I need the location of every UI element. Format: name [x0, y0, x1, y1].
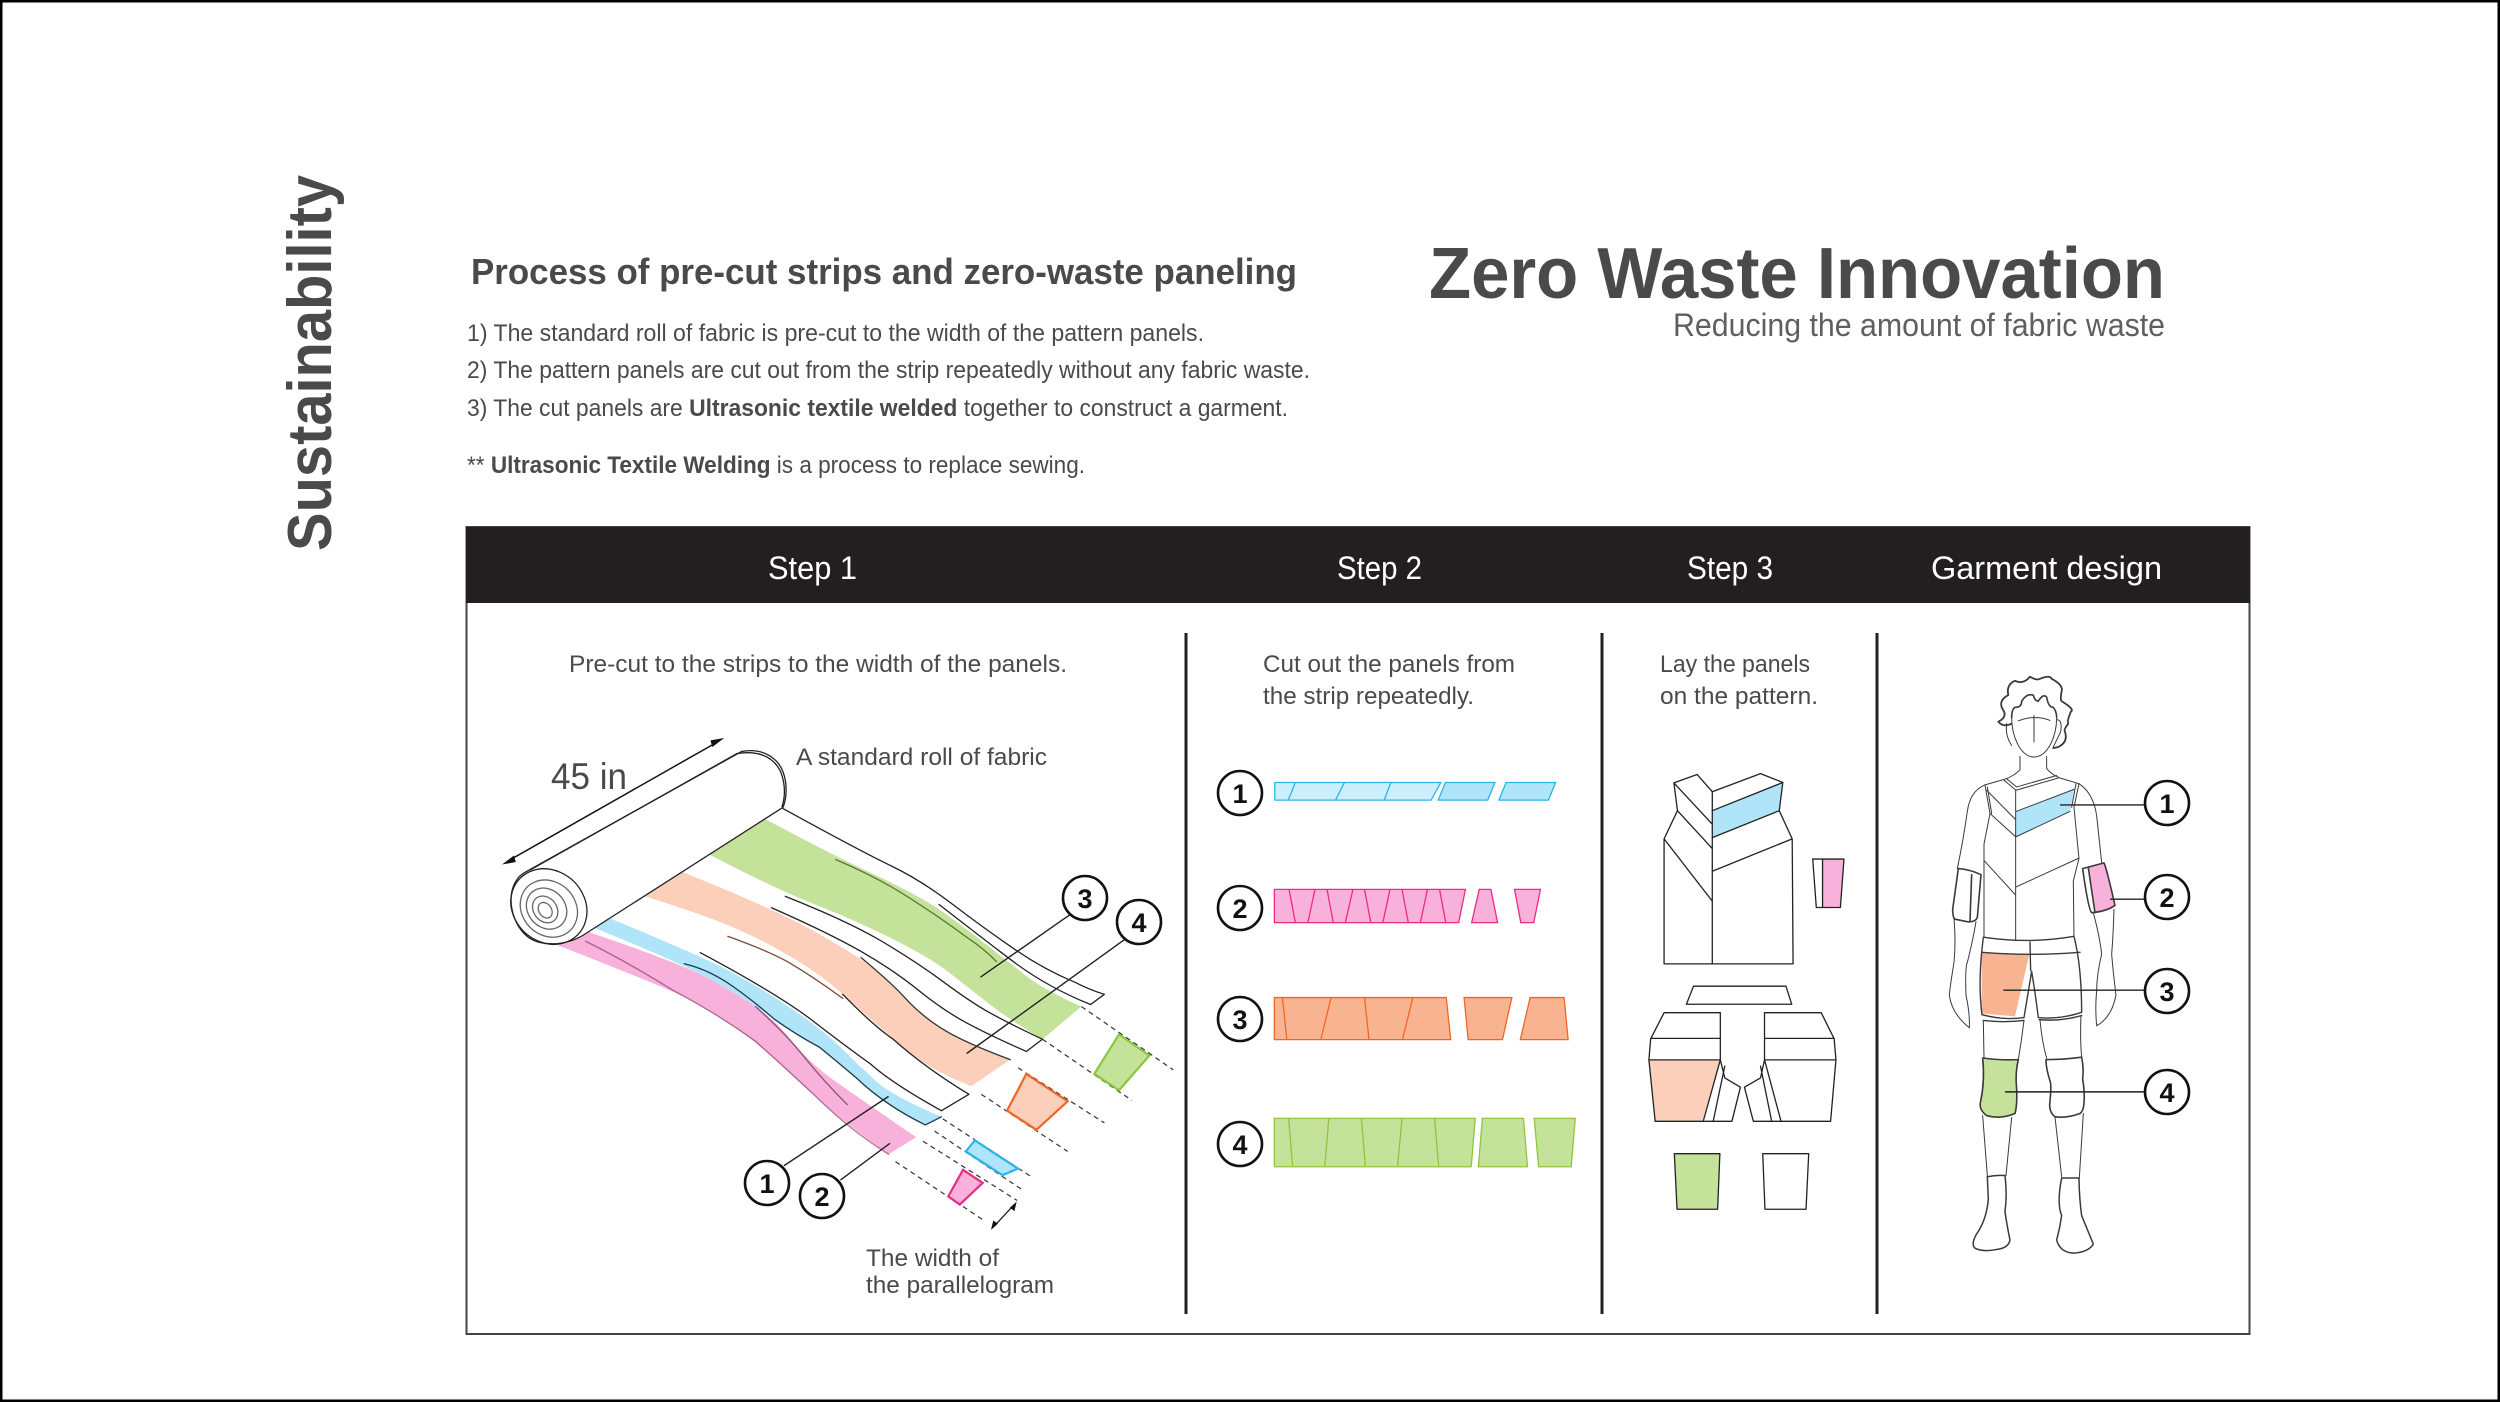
- panel: process table: [466, 527, 2250, 1334]
- arrow: width of parallelogram: [991, 1202, 1017, 1230]
- number badges: roll: 3: [1077, 884, 1093, 914]
- step 2: cut strips: [1274, 782, 1575, 1167]
- number badges: step 2: [1218, 771, 1262, 1166]
- step 3 caption: [1660, 651, 1818, 710]
- number badges: figure: 4: [2159, 1078, 2175, 1108]
- shorts pattern: [1649, 986, 1836, 1121]
- pink strip: [558, 931, 916, 1154]
- label: width of parallelogram: the parallelogram: [866, 1272, 1054, 1299]
- number badges: step 2: 3: [1232, 1005, 1248, 1035]
- dimension arrow: 45 in: [502, 738, 724, 865]
- label: width of parallelogram: The width of: [866, 1245, 999, 1272]
- label: standard roll: A standard roll of fabric: [796, 744, 1047, 771]
- strip 4 green: [1274, 1118, 1575, 1167]
- sketch lines on strips: [586, 809, 1104, 1154]
- peach strip: [645, 872, 1010, 1086]
- cut pieces: [948, 1034, 1149, 1205]
- label: width of parallelogram: [866, 1245, 1054, 1299]
- step 3 caption: on the pattern.: [1660, 683, 1818, 710]
- header bar: Garment design: [1931, 550, 2162, 586]
- green strip: [707, 819, 1081, 1039]
- title: Zero Waste Innovation: Zero Waste Innovation: [1429, 234, 2165, 314]
- number badges: figure: 1: [2159, 789, 2175, 819]
- header bar: Step 1: [768, 550, 857, 586]
- number badges: roll: 1: [759, 1169, 775, 1199]
- number badges: step 2: 4: [1232, 1130, 1248, 1160]
- subtitle: Reducing the amount of fabric waste: [1673, 307, 2165, 343]
- cut guide dashes: [895, 1007, 1173, 1220]
- fabric roll: [497, 751, 786, 955]
- strip 3 orange: [1274, 998, 1568, 1040]
- sleeve pattern: [1813, 859, 1844, 907]
- knee pattern: [1674, 1154, 1809, 1209]
- dimension label: 45 in: 45 in: [551, 756, 627, 797]
- text block: process description: 3) The cut panels are Ultrasonic textile welded together to construct a garment.: [467, 395, 1288, 422]
- number badges: roll: 2: [814, 1182, 830, 1212]
- number badges: figure: 2: [2159, 883, 2175, 913]
- text block: process description: ** Ultrasonic Textile Welding is a process to replace sewing.: [467, 452, 1085, 479]
- illustration: fabric roll with strips: [497, 738, 1173, 1230]
- text block: process description: 2) The pattern panels are cut out from the strip repeatedly without any fabric waste.: [467, 357, 1310, 384]
- step 3 caption: Lay the panels: [1660, 651, 1810, 678]
- leader lines: [2003, 805, 2145, 1092]
- text block: process description: [467, 320, 1310, 479]
- number badges: step 2: 2: [1232, 894, 1248, 924]
- header bar: [466, 527, 2250, 603]
- leader lines: [784, 915, 1125, 1180]
- number badges: roll: [745, 876, 1161, 1218]
- step 2 caption: the strip repeatedly.: [1263, 683, 1474, 710]
- colored panels: [1980, 789, 2115, 1117]
- header bar: Step 3: [1687, 550, 1773, 586]
- figure outline: [1949, 677, 2116, 1253]
- garment design: figure: [1949, 677, 2145, 1253]
- number badges: step 2: 1: [1232, 779, 1248, 809]
- strip 2 pink: [1274, 889, 1540, 923]
- section label: Sustainability: Sustainability: [276, 175, 345, 551]
- step 3: garment pattern: [1649, 774, 1844, 1209]
- number badges: figure: [2145, 781, 2189, 1114]
- header bar: Step 2: [1337, 550, 1422, 586]
- number badges: roll: 4: [1131, 908, 1147, 938]
- step 2 caption: [1263, 651, 1515, 710]
- heading: process of pre-cut strips: Process of pre-cut strips and zero-waste paneling: [471, 251, 1297, 292]
- step 2 caption: Cut out the panels from: [1263, 651, 1515, 678]
- shirt pattern: [1664, 774, 1793, 964]
- text block: process description: 1) The standard roll of fabric is pre-cut to the width of the pattern panels.: [467, 320, 1204, 347]
- strip 1 blue: [1275, 782, 1556, 800]
- number badges: figure: 3: [2159, 977, 2175, 1007]
- blue strip: [592, 919, 941, 1125]
- step 1 caption: Pre-cut to the strips to the width of the panels.: [569, 651, 1067, 678]
